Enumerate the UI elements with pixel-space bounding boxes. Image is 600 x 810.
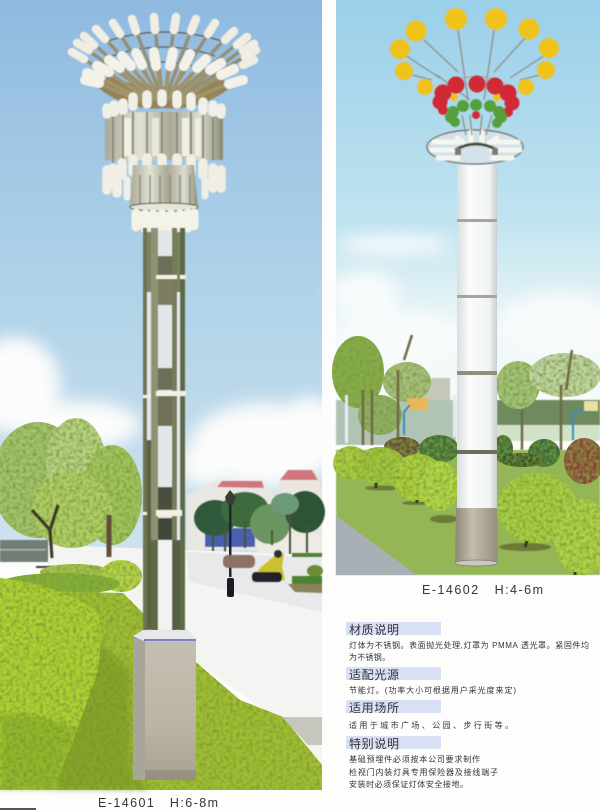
section: light source: 适配光源 [349, 668, 399, 682]
road [48, 545, 322, 780]
caption: E-14602: E-14602 H:4-6m [422, 583, 543, 597]
palm trees and right-side trees [194, 491, 325, 557]
front hedge [0, 578, 100, 790]
tree trunks and railing [0, 505, 109, 568]
inner bulb stems [95, 61, 233, 104]
photo: park scene with lamp E-14602 [331, 0, 600, 575]
pavement [336, 516, 417, 575]
tree trunks, signs and posts [345, 335, 598, 470]
section: special notes: 特别说明 [349, 736, 399, 751]
section: material: 灯体为不锈钢。表面抛光处理,灯罩为 PMMA 透光罩。紧固件均 [349, 640, 589, 650]
lamp column [143, 228, 186, 632]
spec panel [346, 622, 589, 789]
section: applicable places [346, 700, 513, 730]
caption: E-14601: E-14601 H:6-8m [98, 796, 218, 810]
scooter and rider [252, 550, 285, 582]
bush stems [376, 483, 575, 575]
foreground bushes [333, 446, 600, 575]
lamp E-14601 [72, 17, 256, 780]
crown rings and bowl [98, 32, 230, 109]
blurred car [223, 555, 255, 568]
section: material: 为不锈钢。 [349, 652, 390, 662]
lawn shadows [365, 486, 551, 551]
far bushes [384, 435, 600, 484]
green globes [445, 99, 507, 128]
lawn [336, 450, 600, 575]
section: applicable places: 适用场所 [349, 701, 399, 715]
section: material: 材质说明 [349, 622, 399, 637]
sky [331, 0, 600, 440]
willow trees [0, 418, 142, 548]
background trees [332, 336, 600, 435]
section: special notes [346, 736, 498, 789]
photo: street scene with lamp E-14601 [0, 0, 340, 790]
section: special notes: 检视门内装灯具专用保险器及接线端子 [349, 767, 498, 777]
section: light source [346, 667, 516, 695]
upper short bulbs [107, 94, 221, 114]
drain cover [282, 717, 322, 745]
lamp stems [405, 30, 545, 135]
section: special notes: 安装时必须保证灯体安全接地。 [349, 779, 468, 789]
outer bulbs [72, 17, 256, 65]
yellow globes [390, 8, 559, 101]
lamp E-14602 [390, 8, 559, 566]
background buildings [187, 470, 322, 555]
lamp lower cone [130, 165, 198, 230]
outer bulb stems [80, 27, 247, 99]
red globes [432, 76, 520, 119]
section: special notes: 基础预埋件必须按本公司要求制作 [349, 754, 480, 764]
lamp column with bands [455, 150, 498, 566]
bottom-left printed mark [0, 808, 36, 810]
distant bushes [0, 560, 142, 595]
lamp crown: fan of bulbs [72, 17, 256, 109]
right-side low hedge [288, 553, 323, 593]
lawn [0, 590, 322, 790]
sky and clouds [0, 0, 340, 560]
lamp head disc [427, 130, 523, 164]
lamp stone base [133, 630, 196, 780]
section: light source: 节能灯。(功率大小可根据用户采光度来定) [349, 685, 516, 695]
inner bulbs [85, 52, 243, 84]
section: applicable places: 适用于城市广场、公园、步行街等。 [349, 720, 513, 730]
lower short bulbs [107, 158, 221, 193]
section: material [346, 622, 589, 662]
background buildings and posts [336, 378, 600, 445]
lamp mid cylinder [105, 94, 223, 197]
road-side small lamp post [225, 490, 236, 597]
